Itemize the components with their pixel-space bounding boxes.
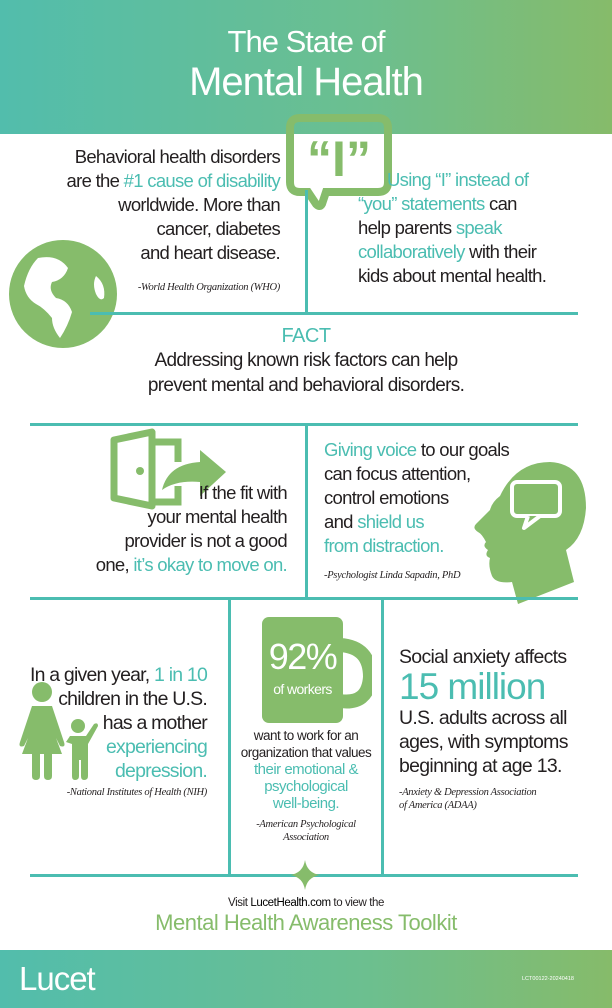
text block: 1 in 10: depression. (115, 760, 207, 782)
text block: I statements: help parents speak (358, 217, 502, 238)
text block: disability: cancer, diabetes (156, 218, 280, 239)
text block: 1 in 10: experiencing (106, 736, 207, 758)
code: LCT00122-20240418 (522, 976, 574, 982)
text block: 1 in 10: children in the U.S. (58, 688, 207, 710)
text block: provider (96, 482, 287, 575)
call to action: Mental Health Awareness Toolkit (155, 910, 457, 935)
text block: I statements: collaboratively with their (358, 241, 536, 262)
text block: I statements: Using “I” instead of (387, 169, 528, 190)
fact block: Addressing known risk factors can help (155, 350, 457, 371)
text block: I statements (358, 169, 546, 286)
header band (0, 0, 612, 134)
title: The State of (228, 24, 384, 59)
text block: provider: your mental health (147, 506, 287, 527)
text block: provider: If the fit with (199, 482, 287, 503)
text block: disability: worldwide. More than (118, 194, 280, 215)
text block: workers: psychological (264, 778, 348, 795)
citation: ADAA: -Anxiety & Depression Association (399, 787, 536, 798)
icon: speech bubble I: “I” (307, 131, 371, 187)
text block: giving voice: from distraction. (324, 535, 444, 556)
icon: star (290, 860, 320, 890)
text block: disability: are the #1 cause of disability (67, 170, 280, 191)
text block: workers: well-being. (273, 795, 339, 812)
text block: giving voice: and shield us (324, 511, 424, 532)
fact block: prevent mental and behavioral disorders. (148, 375, 464, 396)
text block: 1 in 10: In a given year, 1 in 10 (30, 664, 207, 686)
fact block: FACT (281, 325, 331, 347)
citation: ADAA (399, 787, 536, 811)
text block: giving voice: Giving voice to our goals (324, 439, 509, 460)
call to action: Visit LucetHealth.com to view the (228, 897, 384, 909)
footer band (0, 950, 612, 1008)
text block: I statements: “you” statements can (358, 193, 517, 214)
text block: 1 in 10: has a mother (103, 712, 207, 734)
icon: globe (9, 240, 117, 348)
logo: Lucet: Lucet (19, 960, 95, 997)
citation: APA (256, 819, 356, 843)
icon: speech bubble I (286, 114, 392, 210)
citation: WHO: -World Health Organization (WHO) (138, 282, 280, 293)
text block: giving voice (324, 439, 510, 556)
citation: APA: -American Psychological (256, 819, 356, 830)
text block: workers: organization that values (241, 745, 371, 760)
icon: mug 92% (262, 617, 372, 723)
text block: giving voice: control emotions (324, 487, 449, 508)
text: beginning at age 13. (399, 755, 562, 777)
text block: disability: and heart disease. (140, 242, 280, 263)
text block: social anxiety: Social anxiety affects (399, 646, 566, 668)
text block: provider: one, it’s okay to move on. (96, 554, 287, 575)
call to action (155, 897, 458, 935)
icon: mother and child (20, 682, 98, 780)
text block: provider: provider is not a good (124, 530, 287, 551)
text block: disability (67, 146, 281, 263)
icon: mug 92%: 92% (269, 636, 336, 677)
text: U.S. adults across all (399, 707, 567, 729)
citation: Sapadin: -Psychologist Linda Sapadin, PhD (324, 570, 460, 581)
text block: workers: want to work for an (254, 728, 358, 743)
fact block (148, 325, 464, 396)
citation: ADAA: of America (ADAA) (399, 800, 477, 811)
text block: workers: their emotional & (254, 761, 358, 778)
icon: mug 92%: of workers (273, 681, 332, 697)
text: ages, with symptoms (399, 731, 568, 753)
icon: head with speech bubble (474, 462, 586, 604)
text: 15 million (399, 666, 545, 707)
citation: APA: Association (283, 832, 329, 843)
icon: door with arrow (110, 428, 226, 510)
text block: giving voice: can focus attention, (324, 463, 470, 484)
text block: 1 in 10 (30, 664, 208, 782)
text block: workers (241, 728, 372, 812)
text block: I statements: kids about mental health. (358, 265, 546, 286)
title: Mental Health (189, 60, 423, 104)
citation: NIH: -National Institutes of Health (NIH) (67, 787, 207, 798)
title (189, 24, 423, 104)
text block: disability: Behavioral health disorders (75, 146, 280, 167)
